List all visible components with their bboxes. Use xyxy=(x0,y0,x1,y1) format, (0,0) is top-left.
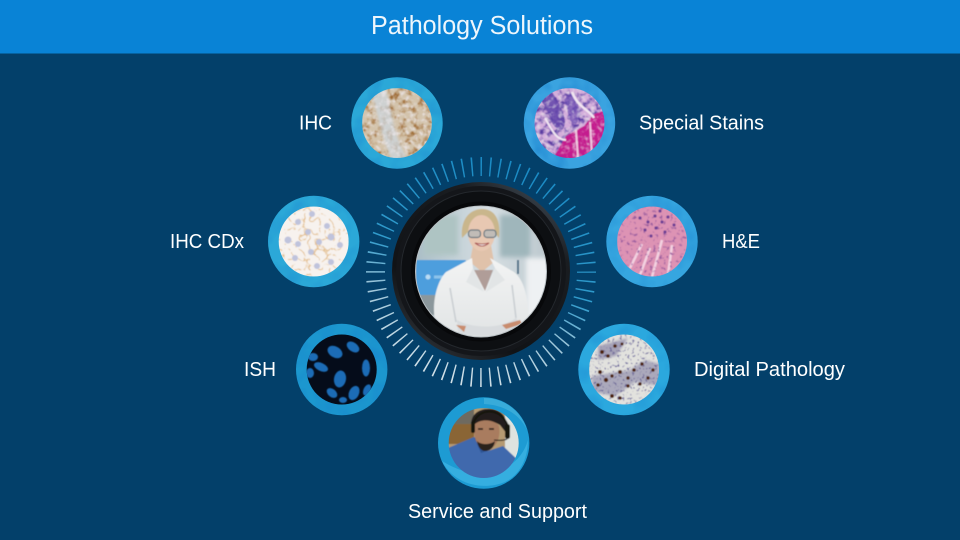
arms xyxy=(456,320,522,332)
lens body xyxy=(392,182,570,360)
Service and Support label: Service and Support xyxy=(408,501,587,523)
Digital Pathology label: Digital Pathology xyxy=(694,359,845,381)
IHC tissue image xyxy=(362,88,432,160)
glasses xyxy=(468,230,496,238)
scientist photo xyxy=(416,206,546,336)
Digital Pathology tissue image xyxy=(589,334,660,405)
shirt xyxy=(449,436,516,478)
node: IHC CDx xyxy=(170,195,360,288)
Special Stains ring xyxy=(523,77,616,169)
IHC ring xyxy=(351,77,443,169)
IHC CDx tissue image xyxy=(278,206,349,277)
central lens with scientist photo xyxy=(392,182,570,360)
node: Service and Support xyxy=(408,397,587,523)
technician photo xyxy=(448,408,520,480)
H&E label: H&E xyxy=(722,231,760,253)
node: Digital Pathology xyxy=(578,323,845,416)
neck xyxy=(470,245,494,272)
Digital Pathology ring xyxy=(578,323,670,416)
smile xyxy=(475,243,489,246)
IHC CDx ring xyxy=(268,195,360,288)
ISH fluorescence image xyxy=(306,334,377,405)
title: Pathology Solutions xyxy=(371,12,593,40)
eyes xyxy=(478,428,494,430)
node: Special Stains xyxy=(523,77,764,169)
H&E ring xyxy=(606,195,698,288)
node: IHC xyxy=(299,77,443,169)
headset xyxy=(473,412,508,426)
face xyxy=(474,420,499,449)
face xyxy=(468,215,495,251)
radial tick ring xyxy=(376,166,586,378)
hair xyxy=(471,409,507,434)
IHC CDx label: IHC CDx xyxy=(170,231,244,253)
node: ISH xyxy=(244,323,388,416)
ISH ring xyxy=(296,323,388,416)
Service and Support ring xyxy=(438,397,529,489)
Special Stains label: Special Stains xyxy=(639,112,764,134)
coat xyxy=(433,258,528,336)
header bar xyxy=(0,0,960,54)
H&E tissue image xyxy=(617,206,688,277)
top under coat xyxy=(473,270,493,291)
beard xyxy=(477,441,495,451)
monitor xyxy=(416,260,466,295)
node: H&E xyxy=(606,195,760,288)
hair xyxy=(462,209,499,238)
ISH label: ISH xyxy=(244,359,276,381)
IHC label: IHC xyxy=(299,112,332,134)
Special Stains tissue image xyxy=(534,88,606,160)
